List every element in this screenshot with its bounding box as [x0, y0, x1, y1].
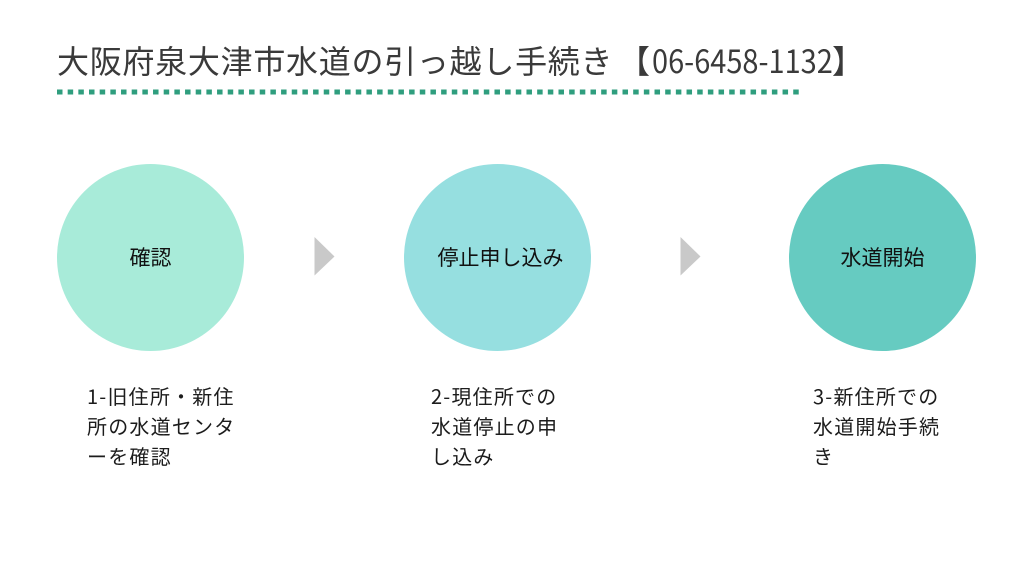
- step 1 description: 1-旧住所・新住: [87, 380, 235, 410]
- step 2 circle: [404, 164, 591, 351]
- step 3 description: 3-新住所での: [813, 380, 939, 410]
- step 1 label: 確認: [130, 242, 172, 272]
- title: [57, 37, 864, 83]
- step 2 description: 2-現住所での: [431, 380, 557, 410]
- step 1 description: [87, 380, 235, 470]
- title underline: [57, 90, 799, 94]
- title: 【: [618, 37, 650, 83]
- arrow 1: [314, 237, 334, 276]
- step 3 description: き: [813, 440, 834, 470]
- step 3 label: 水道開始: [840, 242, 924, 272]
- step 1 description: ーを確認: [87, 440, 172, 470]
- title: 06-6458-1132: [652, 37, 832, 83]
- step 2 description: [431, 380, 558, 470]
- step 1 circle: [57, 164, 244, 351]
- step 2 description: し込み: [431, 440, 495, 470]
- step 3 description: 水道開始手続: [813, 410, 940, 440]
- title: 大阪府泉大津市水道の引っ越し手続き: [57, 37, 613, 83]
- step 2 description: 水道停止の申: [431, 410, 558, 440]
- step 3 circle: [789, 164, 976, 351]
- step 2 label: 停止申し込み: [438, 242, 564, 272]
- arrow 2: [680, 237, 700, 276]
- step 1 description: 所の水道センタ: [87, 410, 235, 440]
- step 3 description: [813, 380, 940, 470]
- text: 】: [832, 37, 864, 83]
